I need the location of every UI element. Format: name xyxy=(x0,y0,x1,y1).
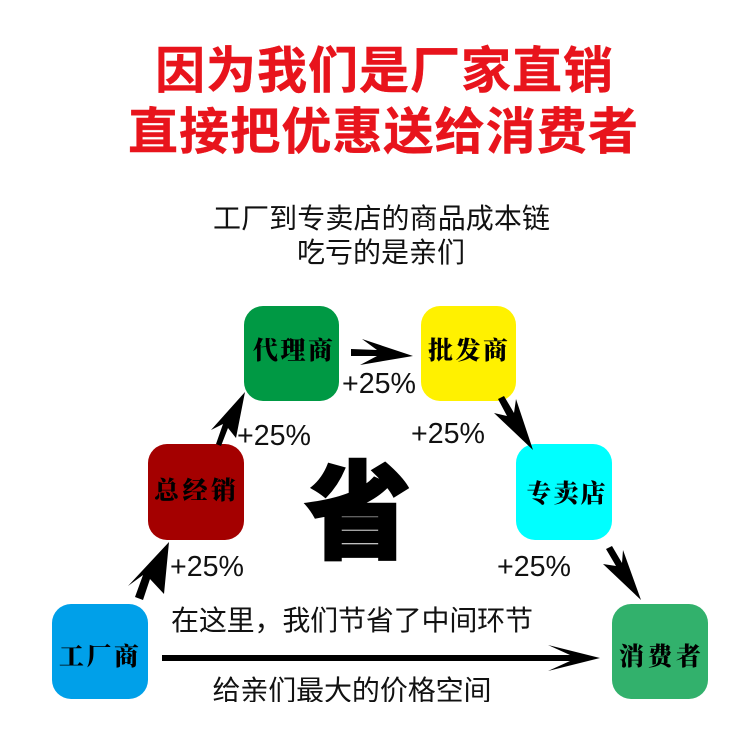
subtitle: 工厂到专卖店的商品成本链 xyxy=(213,203,550,234)
arrow: agent to wholesaler xyxy=(351,339,413,365)
node: specialty store xyxy=(516,444,612,540)
caption: below long arrow: 给亲们最大的价格空间 xyxy=(212,675,492,706)
node: general distributor xyxy=(148,444,244,540)
node: specialty store: 专卖店 xyxy=(526,479,606,508)
node: general distributor: 总经销 xyxy=(154,477,236,505)
title: 因为我们是厂家直销 xyxy=(155,43,613,99)
node: agent: 代理商 xyxy=(253,337,333,365)
arrow: factory direct to consumer xyxy=(162,645,600,671)
node: factory: 工厂商 xyxy=(59,643,139,671)
label: markup 5: +25% xyxy=(497,551,571,583)
bottom white strip xyxy=(0,702,750,750)
arrow: general distributor to agent xyxy=(211,392,245,446)
node: factory xyxy=(52,604,148,699)
label: markup 4: +25% xyxy=(411,418,485,450)
title: 直接把优惠送给消费者 xyxy=(128,104,638,160)
arrow: wholesaler to specialty store xyxy=(494,396,533,450)
label: markup 3: +25% xyxy=(342,368,416,400)
label: markup 2: +25% xyxy=(237,420,311,452)
node: consumer xyxy=(612,604,708,699)
caption: above long arrow: 在这里，我们节省了中间环节 xyxy=(171,605,533,636)
title xyxy=(128,43,638,160)
node: wholesaler xyxy=(421,306,516,401)
label: markup 1: +25% xyxy=(170,551,244,583)
big character: save: 省 xyxy=(305,455,411,573)
node: agent xyxy=(244,306,339,401)
arrow: specialty store to consumer xyxy=(603,546,641,600)
arrow: factory to general distributor xyxy=(128,542,169,600)
subtitle: 吃亏的是亲们 xyxy=(297,237,465,268)
subtitle xyxy=(213,203,550,268)
node: wholesaler: 批发商 xyxy=(428,336,508,365)
node: consumer: 消费者 xyxy=(619,642,701,671)
